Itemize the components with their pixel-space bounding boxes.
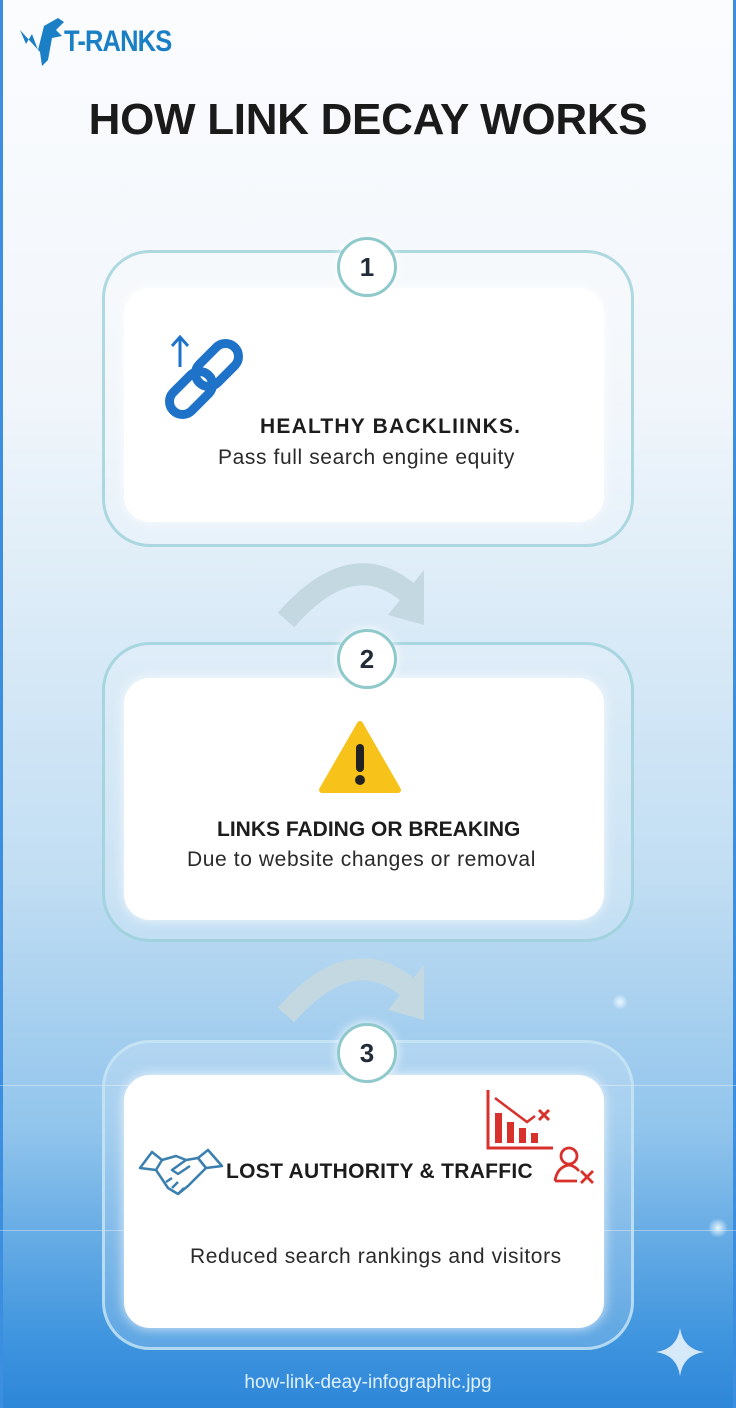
arrow 1 <box>278 563 424 627</box>
badge 2: 2 <box>360 644 374 674</box>
icon: sparkle <box>656 1328 704 1376</box>
icon: falling chart <box>486 1090 553 1150</box>
decorative lines <box>0 1085 736 1086</box>
badge 2 <box>337 629 397 689</box>
glow dots <box>708 1218 728 1238</box>
logo: T-RANKS <box>64 25 171 58</box>
icon: warning <box>319 721 401 793</box>
icon: user x <box>554 1146 594 1184</box>
footer caption: how-link-deay-infographic.jpg <box>244 1372 492 1393</box>
heading 1: HEALTHY BACKLIINKS. <box>260 415 521 438</box>
icon: handshake <box>138 1148 224 1196</box>
arrow 2 <box>278 958 424 1022</box>
icon: chain link <box>165 334 243 419</box>
heading 3: LOST AUTHORITY & TRAFFIC <box>226 1160 533 1183</box>
text 3: Reduced search rankings and visitors <box>190 1245 562 1268</box>
badge 1 <box>337 237 397 297</box>
text 1: Pass full search engine equity <box>218 446 515 469</box>
title: HOW LINK DECAY WORKS <box>89 95 647 144</box>
badge 1: 1 <box>360 252 374 282</box>
text 2: Due to website changes or removal <box>187 848 536 871</box>
logo <box>20 18 172 66</box>
badge 3: 3 <box>360 1038 374 1068</box>
panel: step 2 <box>102 626 634 942</box>
badge 3 <box>337 1023 397 1083</box>
heading 2: LINKS FADING OR BREAKING <box>217 818 520 841</box>
panel: step 1 <box>102 237 634 547</box>
